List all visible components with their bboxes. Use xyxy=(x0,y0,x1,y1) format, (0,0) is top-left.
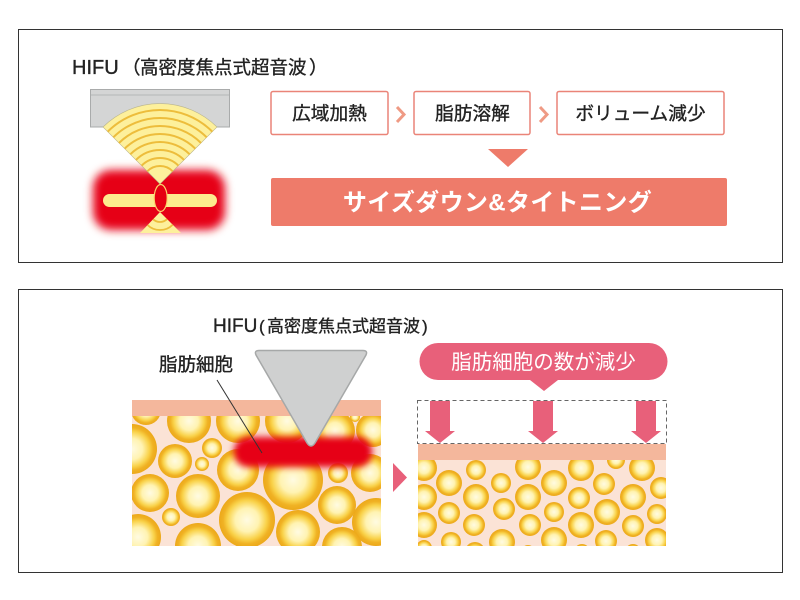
heading: HIFU top: 高密度焦点式超音波 xyxy=(140,57,307,78)
callout: fat cell count decreases xyxy=(420,343,668,391)
box: volume reduction: ボリューム減少 xyxy=(575,103,706,124)
result bar: サイズダウン&タイトニング xyxy=(343,188,652,216)
heading: HIFU bottom: 高密度焦点式超音波 xyxy=(267,317,420,336)
arrow: down 1 xyxy=(425,401,455,443)
dashed removed-volume box xyxy=(418,400,666,444)
box: wide-area heating: 広域加熱 xyxy=(292,103,367,124)
illustration: before xyxy=(132,350,381,546)
heading: HIFU bottom: ( xyxy=(259,317,265,336)
icon: HIFU transducer and focal point xyxy=(85,89,233,238)
arrow: chevron 2 xyxy=(540,107,547,122)
box: fat melting xyxy=(414,92,530,134)
arrow: chevron 1 xyxy=(397,107,404,122)
heading: HIFU bottom: ) xyxy=(422,317,428,336)
result bar xyxy=(271,178,727,226)
arrow: before to after xyxy=(393,463,407,492)
heading: HIFU top: HIFU xyxy=(72,57,119,79)
heading: HIFU top: （ xyxy=(122,57,141,78)
heading: HIFU top: ） xyxy=(309,57,328,78)
arrow: down 3 xyxy=(631,401,661,443)
arrow: down 2 xyxy=(528,401,558,443)
illustration: after xyxy=(418,444,666,546)
label: fat cell: 脂肪細胞 xyxy=(159,354,233,375)
callout: fat cell count decreases: 脂肪細胞の数が減少 xyxy=(451,351,636,374)
panel: top HIFU process xyxy=(18,30,782,262)
heading: HIFU bottom: HIFU xyxy=(213,316,257,337)
box: wide-area heating xyxy=(271,92,388,134)
leader line xyxy=(217,380,262,453)
box: volume reduction xyxy=(557,92,724,134)
panel: bottom fat cell reduction xyxy=(18,290,782,572)
box: fat melting: 脂肪溶解 xyxy=(435,103,510,124)
arrow: down triangle xyxy=(488,149,528,167)
